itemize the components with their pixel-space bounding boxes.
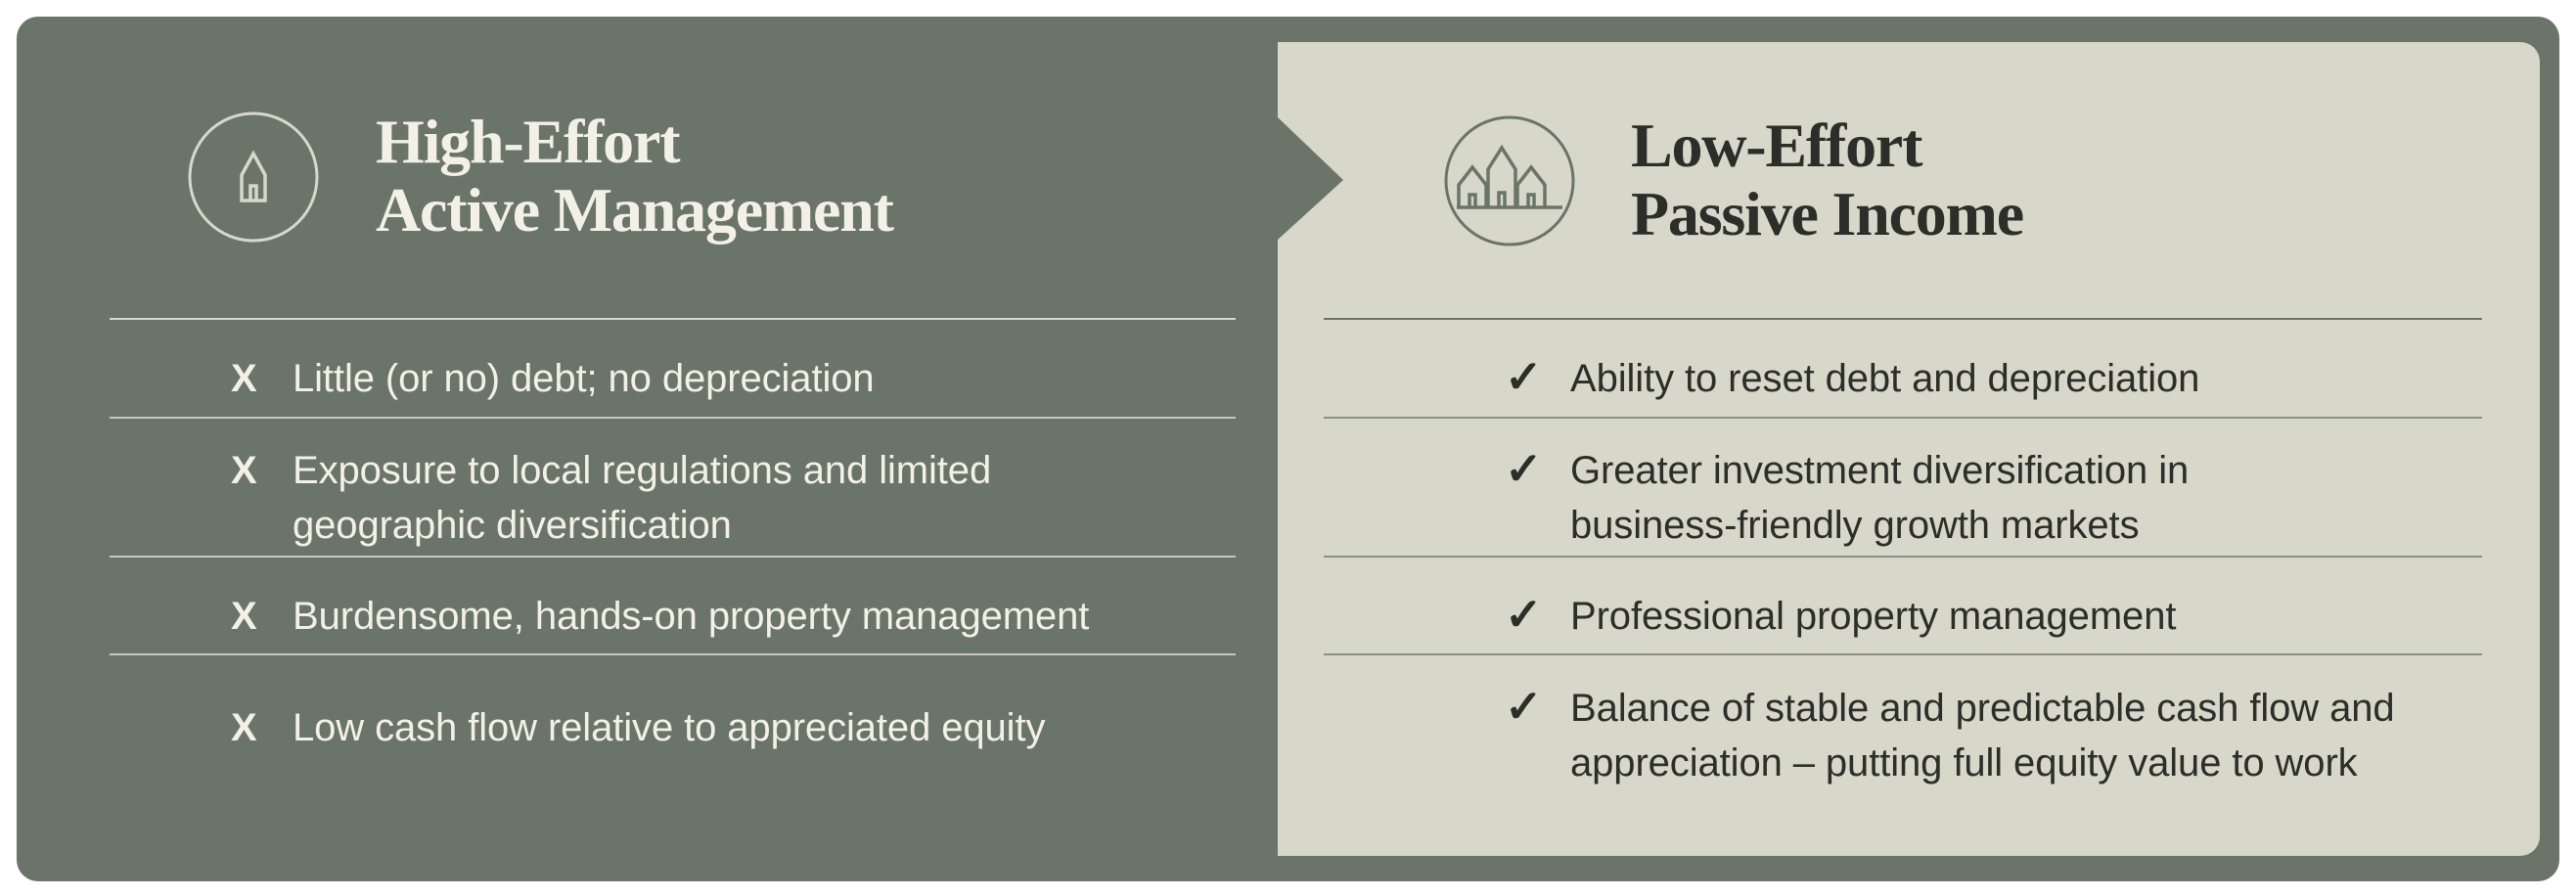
item 4: ✓ [1505,681,1543,732]
item 4 [1505,681,2395,784]
heading: high-effort: High-Effort [376,107,679,176]
heading: low-effort: Passive Income [1631,179,2023,248]
item 1: Little (or no) debt; no depreciation [293,357,875,400]
item 2: Exposure to local regulations and limited [293,449,991,492]
item 2: ✓ [1505,443,1543,494]
heading: low-effort [1631,111,2023,248]
item 4: Low cash flow relative to appreciated equity [293,706,1045,749]
item 3: ✓ [1505,589,1543,640]
list: high-effort drawbacks [231,357,1090,749]
item 2: business-friendly growth markets [1570,504,2139,547]
item 2: geographic diversification [293,504,732,547]
icon: three houses [1444,115,1575,246]
icon: single house [188,112,319,243]
list: low-effort benefits [1505,351,2395,784]
arrow notch [1278,117,1343,240]
heading: high-effort [376,107,894,245]
item 2 [1505,443,2189,547]
item 3: X [231,595,257,638]
item 2 [231,449,991,547]
item 3: Burdensome, hands-on property management [293,595,1089,638]
panel: low-effort light panel [1278,42,2540,856]
heading: low-effort: Low-Effort [1631,111,1921,180]
item 2: Greater investment diversification in [1570,449,2189,492]
item 1: Ability to reset debt and depreciation [1570,357,2199,400]
item 1: X [231,357,257,400]
item 1: ✓ [1505,351,1543,402]
item 4: X [231,706,257,749]
heading: high-effort: Active Management [376,175,893,245]
item 4: Balance of stable and predictable cash flow and [1570,687,2395,730]
item 3: Professional property management [1570,595,2176,638]
item 2: X [231,449,257,492]
item 4: appreciation – putting full equity value to work [1570,741,2358,784]
